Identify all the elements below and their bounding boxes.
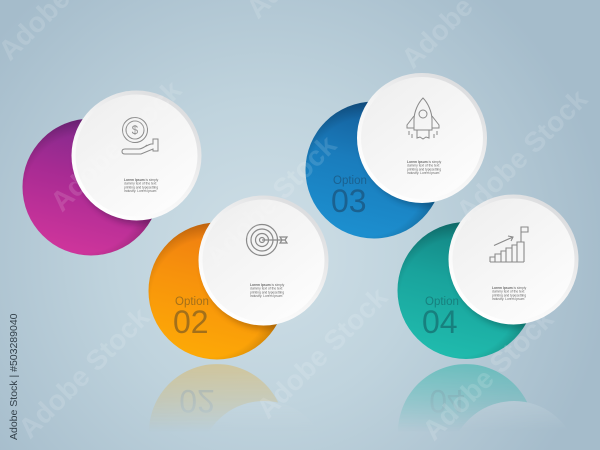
text block: Lorem Ipsum is simply — [492, 286, 527, 290]
option label: Option — [175, 296, 209, 308]
text block: industry. Lorem Ipsum — [250, 294, 283, 298]
option label: 04 — [422, 304, 458, 340]
option label: Option — [425, 296, 459, 308]
option label: Option — [333, 175, 367, 187]
reflections of lower circles — [150, 364, 541, 426]
text block: Lorem Ipsum is simply — [124, 178, 159, 182]
text block: Lorem Ipsum is simply — [250, 283, 285, 287]
orange disc — [148, 222, 277, 360]
reflections of lower circles: 02 — [179, 383, 215, 419]
icon: coin in hand — [122, 118, 158, 154]
watermarks: Adobe Stock — [12, 301, 156, 444]
panel: option 03 — [306, 73, 491, 238]
text block: printing and typesetting — [492, 293, 526, 297]
text block: printing and typesetting — [407, 167, 441, 171]
text block: dummy text of the text — [492, 290, 525, 294]
text block: printing and typesetting — [250, 290, 284, 294]
panel: option 01 — [22, 90, 205, 256]
icon: target with arrow — [246, 224, 287, 256]
watermarks: Adobe Stock — [44, 74, 188, 217]
white circle — [198, 196, 328, 326]
white circle — [72, 90, 202, 220]
text block: dummy text of the text — [407, 164, 440, 168]
icon: growth chart with flag — [490, 227, 528, 262]
text block — [407, 160, 442, 175]
text block: industry. Lorem Ipsum — [124, 189, 157, 193]
panel: option 04 — [398, 194, 582, 359]
white circle — [448, 194, 578, 324]
watermarks: Adobe Stock — [450, 83, 594, 226]
text block: printing and typesetting — [124, 185, 158, 189]
vertical stock id: Adobe Stock | #503289040 — [8, 313, 20, 440]
watermarks: Adobe Stock — [199, 129, 343, 272]
option label: 03 — [331, 183, 367, 219]
option label: 02 — [173, 304, 209, 340]
watermarks: Adobe Stock — [250, 281, 394, 424]
white circle — [357, 73, 487, 203]
icon: rocket — [407, 98, 439, 139]
text block — [124, 178, 159, 193]
text block: Lorem Ipsum is simply — [407, 160, 442, 164]
watermarks: Adobe Stock — [416, 303, 560, 446]
text block: dummy text of the text — [124, 182, 157, 186]
teal disc — [398, 222, 526, 359]
text block: industry. Lorem Ipsum — [407, 171, 440, 175]
reflections of lower circles: 04 — [429, 383, 465, 419]
blue disc — [306, 102, 435, 238]
text block: industry. Lorem Ipsum — [492, 297, 525, 301]
text block — [250, 283, 285, 298]
icon: coin in hand: $ — [132, 125, 139, 137]
panel: option 02 — [148, 196, 332, 360]
purple disc — [22, 119, 152, 256]
text block — [492, 286, 527, 301]
text block: dummy text of the text — [250, 287, 283, 291]
